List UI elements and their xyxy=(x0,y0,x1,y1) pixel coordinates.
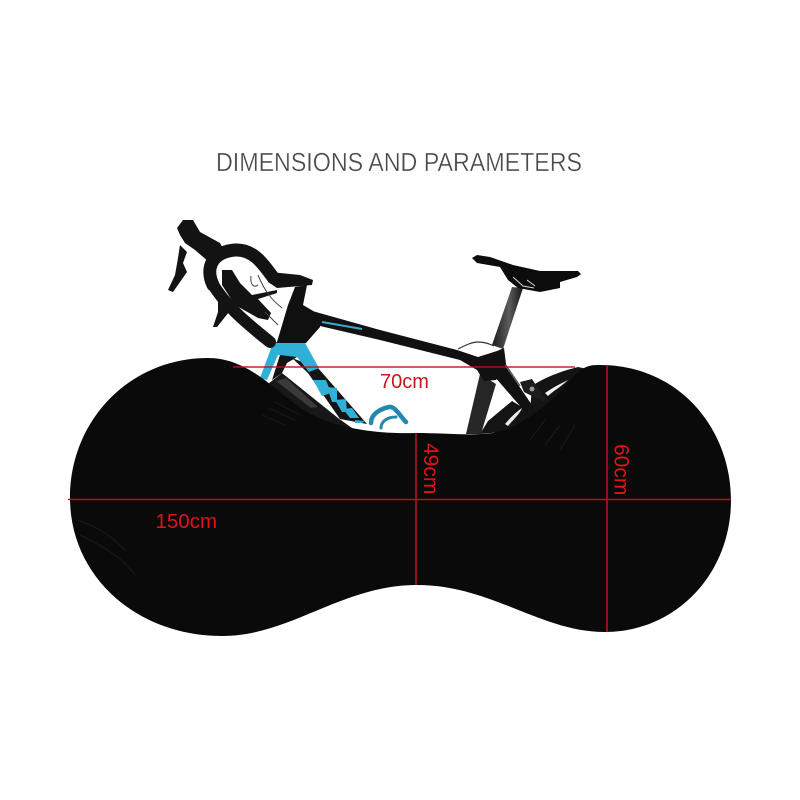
brake cable xyxy=(458,342,494,349)
front wheel and fork xyxy=(268,373,352,430)
frame graphics: blue xyxy=(260,343,365,423)
bottle cage xyxy=(371,407,406,428)
illustration: bicycle xyxy=(168,220,592,434)
down tube xyxy=(292,358,367,424)
brake levers xyxy=(168,245,187,292)
dimension: 150cm: 150cm xyxy=(156,510,217,533)
lower drop bar xyxy=(212,283,270,342)
stem xyxy=(268,272,313,288)
brake hood xyxy=(177,220,225,262)
chain stay and derailleur xyxy=(494,364,547,414)
rear wheel xyxy=(480,367,592,434)
cover folds xyxy=(76,402,575,575)
seat post xyxy=(492,287,523,349)
second brake hood xyxy=(222,270,277,320)
head tube xyxy=(272,285,320,344)
main frame: top tube xyxy=(290,307,506,381)
bike cover xyxy=(70,358,731,636)
cables xyxy=(251,275,282,325)
handlebar xyxy=(168,220,313,342)
dimension: 70cm: 70cm xyxy=(380,371,429,393)
dimension: 49cm: 49cm xyxy=(419,443,442,494)
bar loop xyxy=(210,250,272,285)
top tube logo xyxy=(322,322,362,329)
title: DIMENSIONS AND PARAMETERS xyxy=(216,147,582,177)
seat tube xyxy=(466,374,496,434)
saddle xyxy=(472,255,581,292)
dimension: 60cm: 60cm xyxy=(610,444,632,495)
